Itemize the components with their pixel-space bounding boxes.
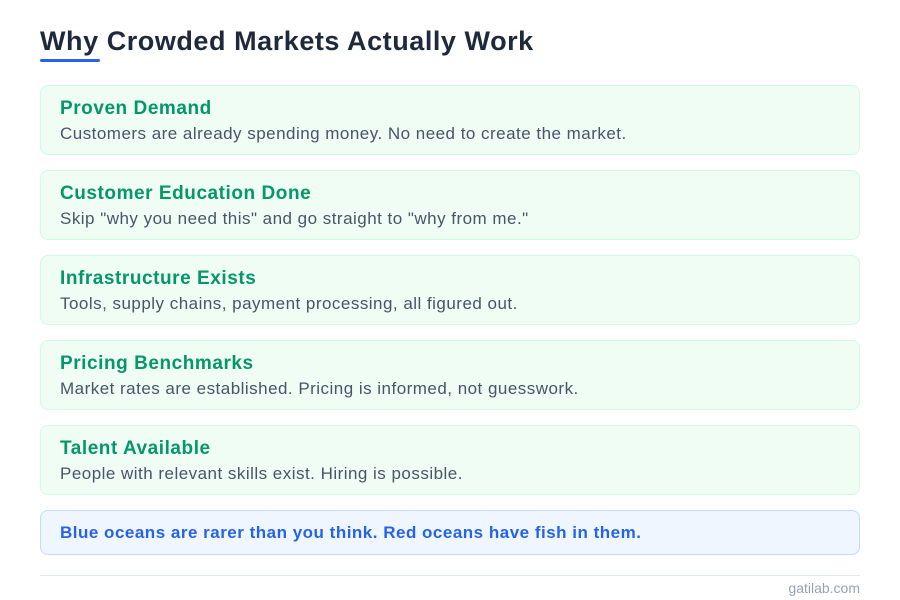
footer: gatilab.com [788,580,860,596]
card: talent: People with relevant skills exist. Hiring is possible. [60,464,463,483]
card: proven demand: Customers are already spending money. No need to create the market. [60,124,627,143]
callout: Blue oceans are rarer than you think. Red oceans have fish in them. [60,523,641,542]
title: Why Crowded Markets Actually Work [40,26,534,56]
card: proven demand [40,85,860,155]
card: infrastructure: Infrastructure Exists [60,268,256,289]
callout [40,510,860,555]
card: customer education: Skip "why you need this" and go straight to "why from me." [60,209,529,228]
card: talent [40,425,860,495]
card: infrastructure [40,255,860,325]
card: proven demand: Proven Demand [60,98,212,119]
title underline [40,59,100,62]
card: customer education [40,170,860,240]
card: talent: Talent Available [60,438,211,459]
card: pricing: Market rates are established. Pricing is informed, not guesswork. [60,379,579,398]
card: infrastructure: Tools, supply chains, payment processing, all figured out. [60,294,518,313]
card: customer education: Customer Education Done [60,183,311,204]
card: pricing [40,340,860,410]
card: pricing: Pricing Benchmarks [60,353,254,374]
